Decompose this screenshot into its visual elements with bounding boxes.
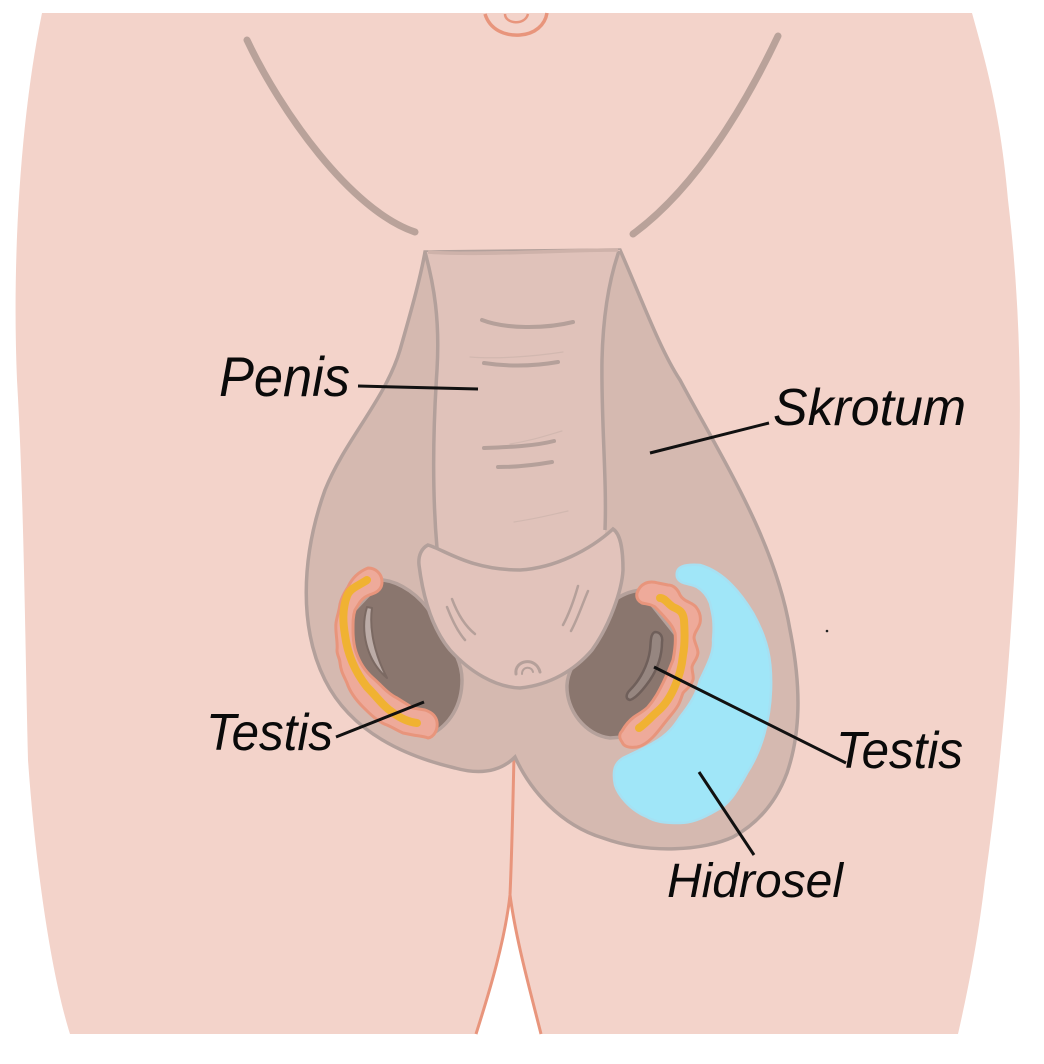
- right epididymis: [620, 582, 700, 747]
- label: Hidrosel: [667, 772, 844, 908]
- label: Testis left: [206, 702, 424, 762]
- label: Testis right: [654, 667, 963, 780]
- hydrocele fluid: [614, 565, 771, 823]
- label: Penis: Penis: [219, 345, 350, 408]
- right testis highlight: [627, 632, 662, 700]
- glans: [419, 529, 623, 688]
- scrotum: [306, 250, 798, 849]
- left epididymis: [336, 568, 437, 738]
- label: Testis right: Testis: [836, 722, 963, 780]
- label: Testis left: Testis: [206, 704, 333, 762]
- groin crease left: [247, 40, 415, 232]
- label: Skrotum: Skrotum: [773, 379, 966, 437]
- label: Skrotum: [650, 379, 966, 453]
- navel: [485, 13, 547, 35]
- groin crease right: [633, 36, 778, 234]
- penis shaft: [425, 250, 620, 580]
- left testis highlight: [364, 607, 387, 678]
- left testis: [345, 580, 462, 735]
- right testis: [567, 590, 680, 738]
- perineal line: [476, 755, 541, 1034]
- skin folds: [447, 320, 588, 674]
- label: Penis: [219, 345, 478, 408]
- stray dot: [826, 630, 828, 632]
- label: Hidrosel: Hidrosel: [667, 855, 844, 908]
